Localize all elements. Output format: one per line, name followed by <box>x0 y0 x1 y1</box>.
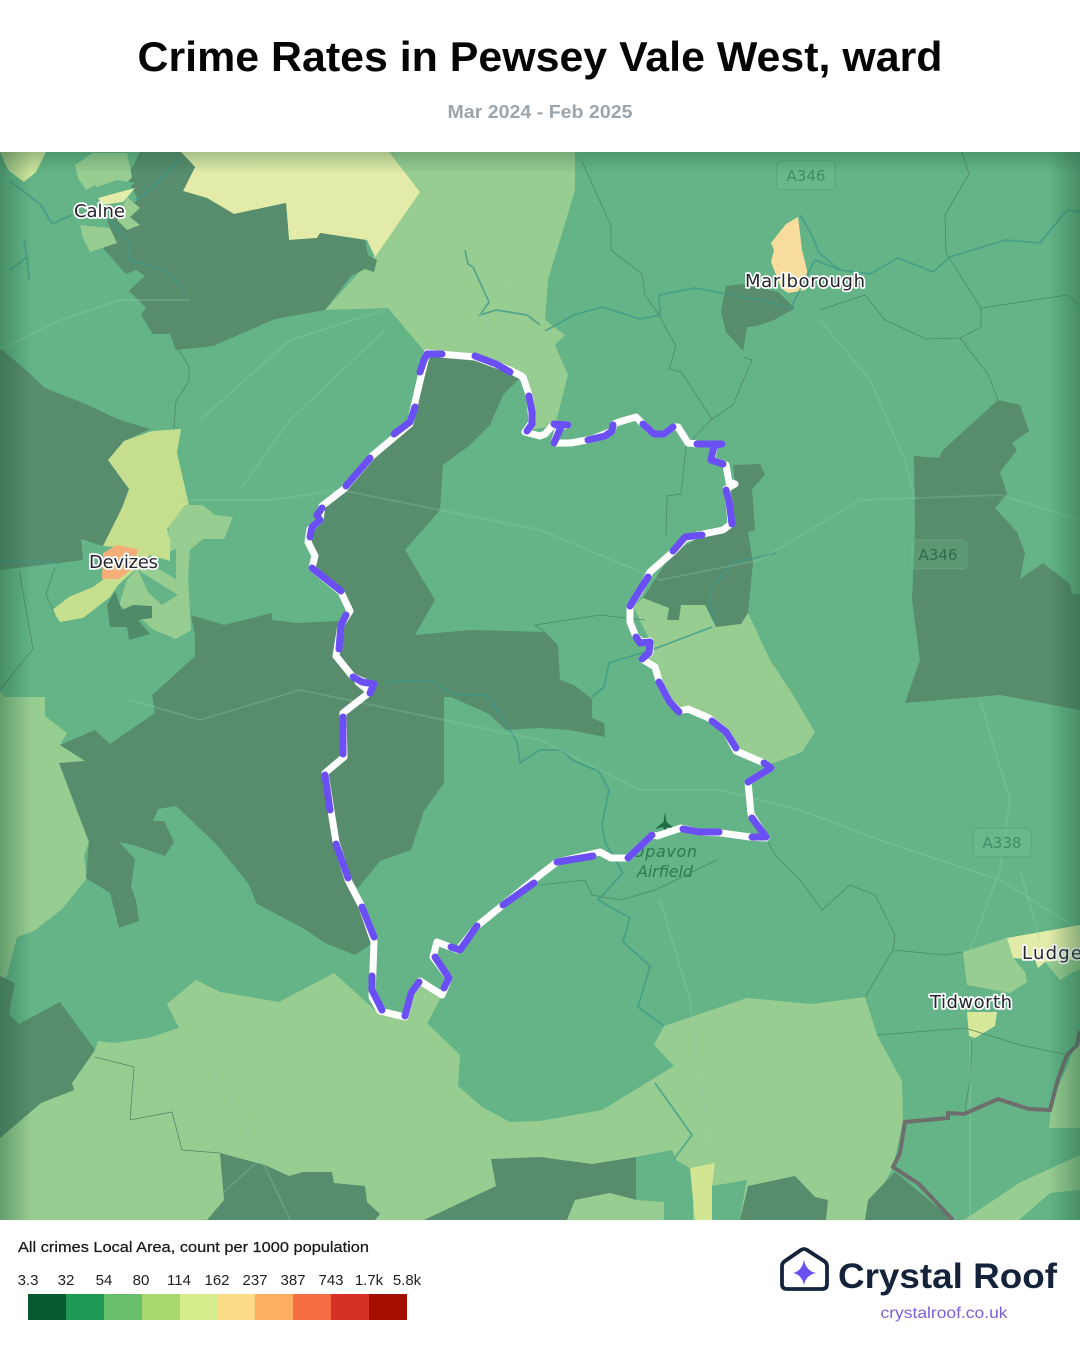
rivers <box>0 160 1080 1159</box>
road shield: A346 east <box>909 540 967 569</box>
county boundary line <box>893 1031 1080 1220</box>
region: light area at ward east <box>633 598 815 763</box>
label: Marlborough: Marlborough <box>745 271 865 292</box>
ward outline purple dashes <box>310 354 771 1016</box>
ward outline white base <box>308 353 771 1017</box>
region: ward south notch light <box>408 986 440 1024</box>
region: dark area at ward east <box>643 464 765 627</box>
road shield: A338: A338 <box>983 834 1021 852</box>
label: Upavon Airfield: Airfield <box>636 862 694 881</box>
region: north-west dark area <box>103 152 377 350</box>
subtitle: date range: Mar 2024 - Feb 2025 <box>448 102 632 122</box>
region: Calne wards <box>75 153 140 252</box>
icon: house with star <box>782 1249 827 1289</box>
road shield: A346 north: A346 <box>787 167 825 185</box>
logo wordmark: Crystal Roof <box>838 1257 1057 1296</box>
region: central dark area <box>308 353 605 888</box>
region: south-east light areas <box>964 1030 1080 1220</box>
title: Crime Rates in Pewsey Vale West, ward <box>138 33 942 80</box>
legend values: 387 <box>280 1272 306 1289</box>
region: western light strip <box>0 692 89 980</box>
road shield: A338 <box>973 828 1031 857</box>
region: southern light band <box>0 973 903 1220</box>
region: north-west corner yellow <box>0 152 46 182</box>
region: west dark area <box>0 348 150 570</box>
region: south-west dark corner <box>0 976 95 1138</box>
roads <box>0 280 1080 1260</box>
road shield: A346 east: A346 <box>919 546 957 564</box>
region: south-west dark area <box>59 613 374 955</box>
legend values: 162 <box>204 1272 230 1289</box>
label: Calne: Calne <box>74 201 125 222</box>
label: Upavon Airfield: Upavon <box>633 842 697 861</box>
legend values: 3.3 <box>18 1272 38 1289</box>
legend values: 32 <box>58 1272 74 1289</box>
region: Tidworth and Ludgershall wards <box>963 925 1080 1038</box>
legend values: 54 <box>96 1272 112 1289</box>
label: Devizes: Devizes <box>89 552 158 573</box>
legend title: All crimes Local Area, count per 1000 population <box>18 1239 369 1256</box>
label: Upavon Airfield <box>635 846 696 877</box>
map edge shading <box>0 152 1080 1220</box>
legend values: 1.7k <box>355 1272 384 1289</box>
region: Devizes wards <box>52 429 233 640</box>
legend values <box>18 1272 422 1289</box>
region: eastern dark area by A346 <box>905 400 1080 710</box>
legend values: 5.8k <box>393 1272 422 1289</box>
region: northern yellow area <box>181 152 420 257</box>
legend values: 80 <box>133 1272 149 1289</box>
region: Marlborough dark ward <box>721 284 795 351</box>
region: Marlborough yellow ward <box>771 217 807 293</box>
logo: Crystal Roof <box>782 1249 1057 1322</box>
legend <box>18 1239 422 1320</box>
region: south dark areas <box>207 1150 953 1220</box>
region: northern light band <box>325 152 575 430</box>
ward outline: Pewsey Vale West <box>308 353 771 1017</box>
label: Tidworth: Tidworth <box>929 992 1012 1013</box>
boundaries <box>0 152 1080 1153</box>
road shield: A346 north <box>777 161 835 190</box>
legend values: 237 <box>242 1272 268 1289</box>
icon: airfield plane <box>655 812 672 830</box>
logo url: crystalroof.co.uk <box>880 1305 1009 1322</box>
legend colour bar <box>28 1294 407 1320</box>
legend values: 114 <box>167 1272 191 1289</box>
legend values: 743 <box>318 1272 344 1289</box>
